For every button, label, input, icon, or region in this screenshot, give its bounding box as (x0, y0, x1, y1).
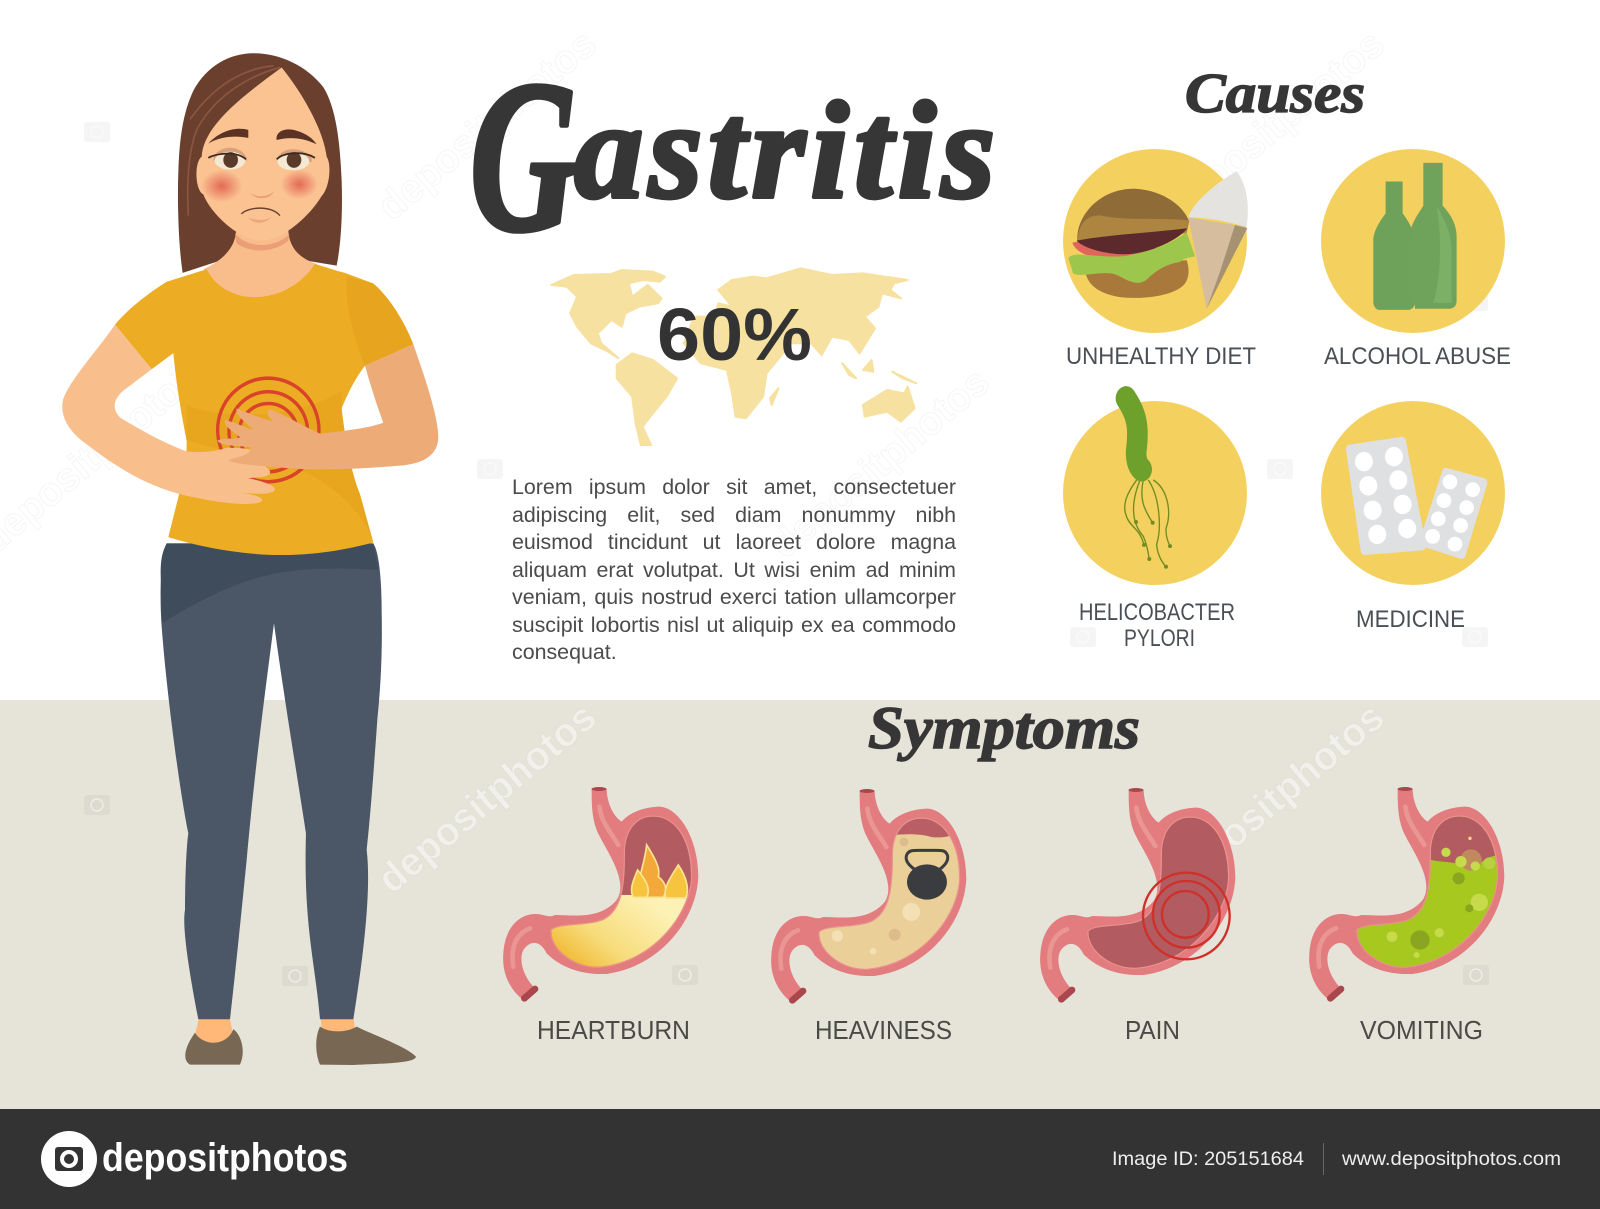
icon: burger and ice cream (1068, 171, 1248, 309)
world map (551, 268, 916, 445)
stomach with pain rings (1040, 788, 1237, 1001)
heading: symptoms: Symptoms (868, 695, 1140, 761)
stomach with kettlebell (771, 789, 968, 1002)
watermark text: depositphotos (370, 22, 605, 229)
label (1079, 599, 1235, 652)
label: ALCOHOL ABUSE (1324, 343, 1511, 370)
lower background band (0, 700, 1600, 1109)
title (470, 38, 1000, 277)
upper body (62, 53, 438, 555)
body text paragraph: suscipit lobortis nisl ut aliquip ex ea commodo (512, 612, 956, 636)
label: HEARTBURN (537, 1015, 690, 1045)
label: HEAVINESS (815, 1015, 952, 1045)
title: astritis (574, 74, 1000, 228)
right arm (217, 344, 438, 469)
symptom: heaviness (771, 789, 968, 1045)
cause: unhealthy diet (1063, 149, 1256, 370)
body text paragraph (512, 475, 956, 664)
eyes (213, 148, 312, 162)
cause: alcohol abuse (1321, 149, 1511, 370)
body text paragraph: aliquam erat volutpat. Ut wisi enim ad minim (512, 558, 956, 582)
cheeks (201, 170, 242, 202)
watermark text (0, 22, 1393, 902)
label: HELICOBACTER (1079, 599, 1235, 626)
logo mark (41, 1131, 97, 1187)
footer bar (0, 1109, 1600, 1209)
statistic: 60%: 60% (657, 293, 812, 376)
watermark text: depositphotos (370, 695, 605, 902)
cause: medicine (1321, 401, 1505, 633)
watermark text: depositphotos (763, 360, 998, 567)
illustration: woman holding stomach (62, 53, 438, 1065)
label: PYLORI (1124, 625, 1195, 652)
heading: causes: Causes (1185, 63, 1365, 125)
eyebrows (208, 129, 317, 144)
neck (203, 228, 317, 301)
shirt (115, 264, 413, 555)
symptom: heartburn (503, 787, 700, 1045)
body text paragraph: Lorem ipsum dolor sit amet, consectetuer (512, 475, 956, 499)
cause: helicobacter pylori (1063, 398, 1247, 652)
hair (178, 53, 342, 273)
left arm (62, 325, 275, 504)
icon: bacterium (1125, 398, 1172, 569)
nose and mouth (250, 191, 274, 198)
label: VOMITING (1360, 1015, 1483, 1045)
watermark text: depositphotos (1158, 695, 1393, 902)
body text paragraph: euismod tincidunt ut laoreet dolore magna (512, 530, 956, 554)
stomach with flames (503, 787, 700, 1000)
symptom: vomiting (1309, 787, 1506, 1045)
face (196, 67, 329, 241)
stomach with green bile (1309, 787, 1506, 1000)
label: UNHEALTHY DIET (1066, 343, 1256, 370)
legs and shoes (161, 543, 416, 1065)
image id: Image ID: 205151684 (1112, 1148, 1304, 1170)
logo wordmark: depositphotos (102, 1136, 348, 1180)
watermark text: depositphotos (1158, 22, 1393, 229)
body text paragraph: veniam, quis nostrud exerci tation ullamcorper (512, 585, 956, 609)
pain rings (218, 378, 319, 482)
icon: blister packs (1350, 441, 1483, 554)
symptom: pain (1040, 788, 1237, 1045)
label: MEDICINE (1356, 606, 1465, 633)
label: PAIN (1125, 1015, 1180, 1045)
body text paragraph: consequat. (512, 640, 617, 664)
icon: bottles (1373, 163, 1457, 310)
body text paragraph: adipiscing elit, sed diam nonummy nibh (512, 502, 956, 526)
site url: www.depositphotos.com (1341, 1148, 1561, 1170)
title: G (470, 38, 577, 277)
